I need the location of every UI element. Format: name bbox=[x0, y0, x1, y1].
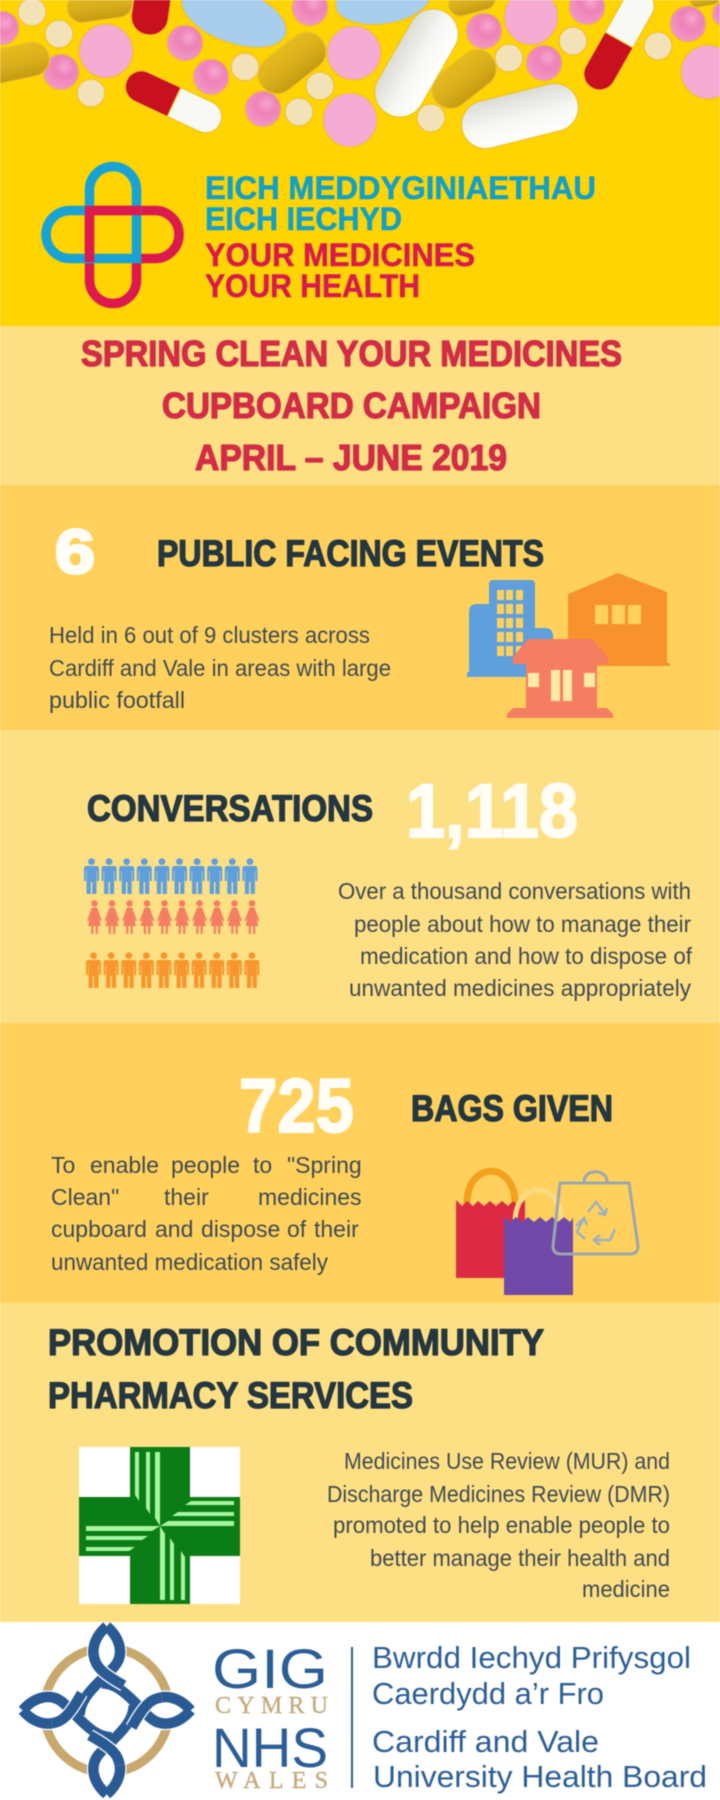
title: SPRING CLEAN YOUR MEDICINES bbox=[81, 333, 622, 374]
text: bags description: cupboard bbox=[51, 1216, 147, 1242]
panel: footer bbox=[0, 1622, 720, 1800]
panel: promotion of community pharmacy services bbox=[0, 1303, 720, 1622]
logo text: YOUR MEDICINES bbox=[205, 237, 475, 273]
logo text: YOUR HEALTH bbox=[205, 268, 420, 304]
text: bags description: enable bbox=[90, 1152, 159, 1178]
text: bags description: of bbox=[287, 1216, 307, 1242]
panel: public facing events bbox=[0, 485, 720, 730]
title: APRIL – JUNE 2019 bbox=[195, 437, 507, 478]
heading: promotion: PROMOTION OF COMMUNITY bbox=[48, 1322, 544, 1363]
text: bags description: "Spring bbox=[287, 1152, 362, 1178]
text: conversations description: people about how to manage their bbox=[354, 911, 691, 937]
panel: conversations bbox=[0, 730, 720, 1023]
text: events description: public footfall bbox=[49, 687, 185, 713]
text: events description: Cardiff and Vale in areas with large bbox=[49, 655, 391, 681]
number 6: 6 bbox=[55, 518, 95, 587]
header background bbox=[0, 0, 720, 326]
text: events description bbox=[49, 622, 391, 713]
chart: people pictogram bbox=[84, 858, 260, 988]
text: bags description: Clean" bbox=[51, 1184, 119, 1210]
red and white capsule right bbox=[578, 0, 660, 96]
number 725: 725 bbox=[239, 1064, 354, 1149]
icon: buildings bbox=[467, 573, 670, 718]
panel: bags given bbox=[0, 1023, 720, 1303]
logo text: GIG Cymru NHS Wales: CYMRU bbox=[215, 1693, 328, 1719]
text: conversations description bbox=[338, 878, 693, 1001]
text: bags description: and bbox=[155, 1216, 193, 1242]
heading: promotion: PHARMACY SERVICES bbox=[48, 1375, 413, 1416]
number 1,118: 1,118 bbox=[406, 769, 578, 854]
title bbox=[81, 333, 622, 478]
heading: bags given: BAGS GIVEN bbox=[411, 1088, 613, 1129]
text: bags description: unwanted medication safely bbox=[51, 1249, 328, 1275]
text: pharmacy description: medicine bbox=[582, 1576, 670, 1602]
text: health board name: Caerdydd a’r Fro bbox=[372, 1676, 604, 1711]
text: health board name: Bwrdd Iechyd Prifysgol bbox=[372, 1640, 691, 1675]
text: bags description bbox=[51, 1152, 362, 1275]
icon: pharmacy green cross bbox=[79, 1447, 240, 1604]
panel: title band bbox=[0, 326, 720, 485]
text: pharmacy description: promoted to help enable people to bbox=[333, 1512, 670, 1538]
logo text: GIG Cymru NHS Wales: NHS bbox=[212, 1716, 328, 1779]
text: bags description: To bbox=[51, 1152, 75, 1178]
text: conversations description: medication and how to dispose of bbox=[360, 943, 693, 969]
title: CUPBOARD CAMPAIGN bbox=[162, 385, 541, 426]
text: conversations description: Over a thousand conversations with bbox=[338, 878, 691, 904]
text: pharmacy description bbox=[327, 1448, 670, 1602]
heading: conversations: CONVERSATIONS bbox=[87, 788, 373, 829]
text: health board name: Cardiff and Vale bbox=[372, 1724, 599, 1759]
text: pharmacy description: Discharge Medicines Review (DMR) bbox=[327, 1481, 670, 1507]
text: bags description: medicines bbox=[258, 1184, 362, 1210]
icon: NHS Wales knot bbox=[23, 1626, 191, 1794]
text: bags description: their bbox=[164, 1184, 209, 1210]
text: bags description: their bbox=[314, 1216, 359, 1242]
logo text: GIG Cymru NHS Wales: WALES bbox=[215, 1768, 328, 1794]
text: bags description: dispose bbox=[201, 1216, 280, 1242]
heading: public facing events: PUBLIC FACING EVENTS bbox=[157, 533, 544, 574]
text: events description: Held in 6 out of 9 clusters across bbox=[49, 622, 370, 648]
logo text: GIG Cymru NHS Wales bbox=[212, 1637, 328, 1794]
red and white capsule bbox=[120, 66, 227, 138]
pills illustration bbox=[0, 0, 720, 154]
text: health board name: University Health Board bbox=[373, 1759, 707, 1794]
logo text: GIG Cymru NHS Wales: GIG bbox=[212, 1637, 328, 1700]
text: pharmacy description: better manage their health and bbox=[370, 1545, 670, 1571]
logo text bbox=[205, 170, 596, 304]
text: bags description: people bbox=[171, 1152, 240, 1178]
logo text: EICH IECHYD bbox=[205, 201, 402, 237]
icon: shopping bags bbox=[456, 1171, 638, 1295]
logo mark bbox=[46, 167, 179, 303]
text: health board name bbox=[372, 1640, 707, 1794]
heading: promotion bbox=[48, 1322, 544, 1416]
text: pharmacy description: Medicines Use Review (MUR) and bbox=[344, 1448, 670, 1474]
text: bags description: to bbox=[253, 1152, 272, 1178]
text: conversations description: unwanted medicines appropriately bbox=[349, 975, 691, 1001]
logo text: EICH MEDDYGINIAETHAU bbox=[205, 170, 596, 206]
